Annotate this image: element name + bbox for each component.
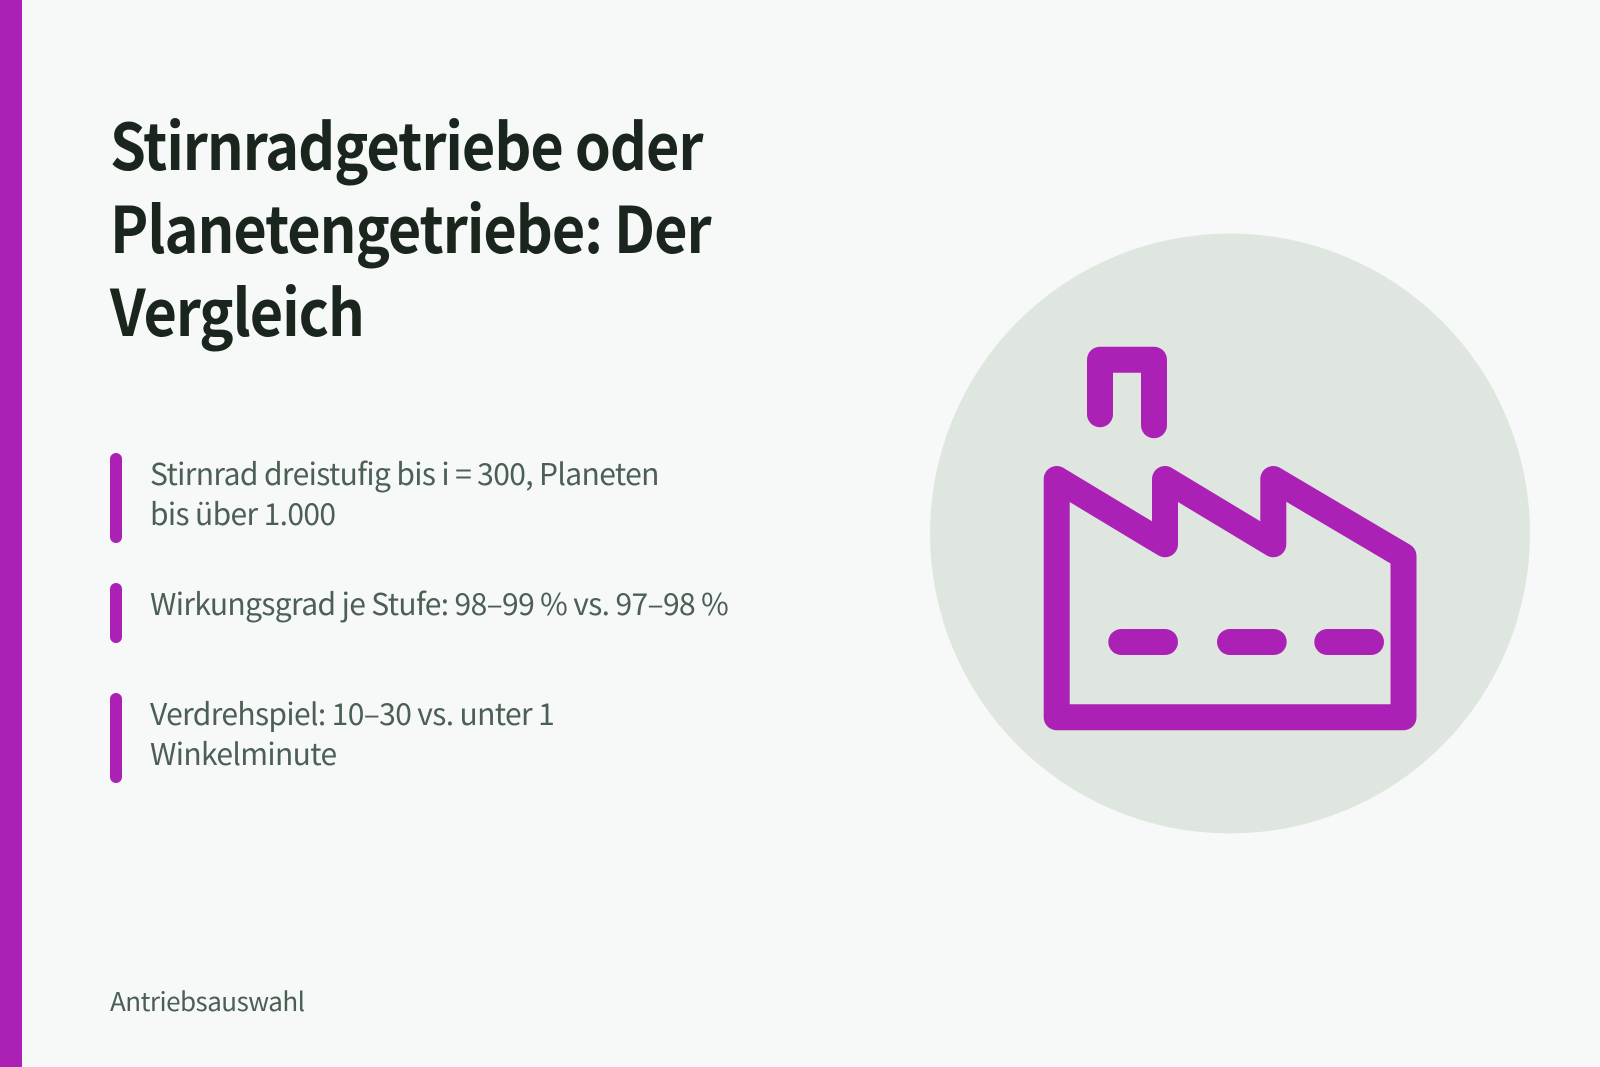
bullet 1 text: bis über 1.000 — [150, 490, 335, 534]
bullet 3 marker — [110, 693, 122, 783]
bullet 1 marker — [110, 453, 122, 543]
bullet 3 text: Verdrehspiel: 10–30 vs. unter 1 — [150, 690, 554, 734]
bullet 2 marker — [110, 583, 122, 643]
factory outline — [1057, 479, 1404, 717]
bullet 3 text — [150, 690, 554, 774]
bullet 3 text: Winkelminute — [150, 730, 336, 774]
windows — [1121, 629, 1371, 655]
background circle — [930, 234, 1530, 834]
title: Planetengetriebe: Der — [110, 180, 711, 272]
title: Stirnradgetriebe oder — [110, 97, 702, 189]
footer label: Antriebsauswahl — [110, 982, 305, 1019]
title: Vergleich — [110, 263, 364, 355]
accent bar: left edge — [0, 0, 22, 1067]
title — [110, 97, 712, 355]
icon: factory — [1057, 360, 1404, 717]
chimney smoke — [1100, 360, 1154, 425]
bullet 1 text — [150, 450, 659, 534]
bullet 1 text: Stirnrad dreistufig bis i = 300, Planeten — [150, 450, 659, 494]
bullet 2 text: Wirkungsgrad je Stufe: 98–99 % vs. 97–98 % — [150, 580, 728, 624]
